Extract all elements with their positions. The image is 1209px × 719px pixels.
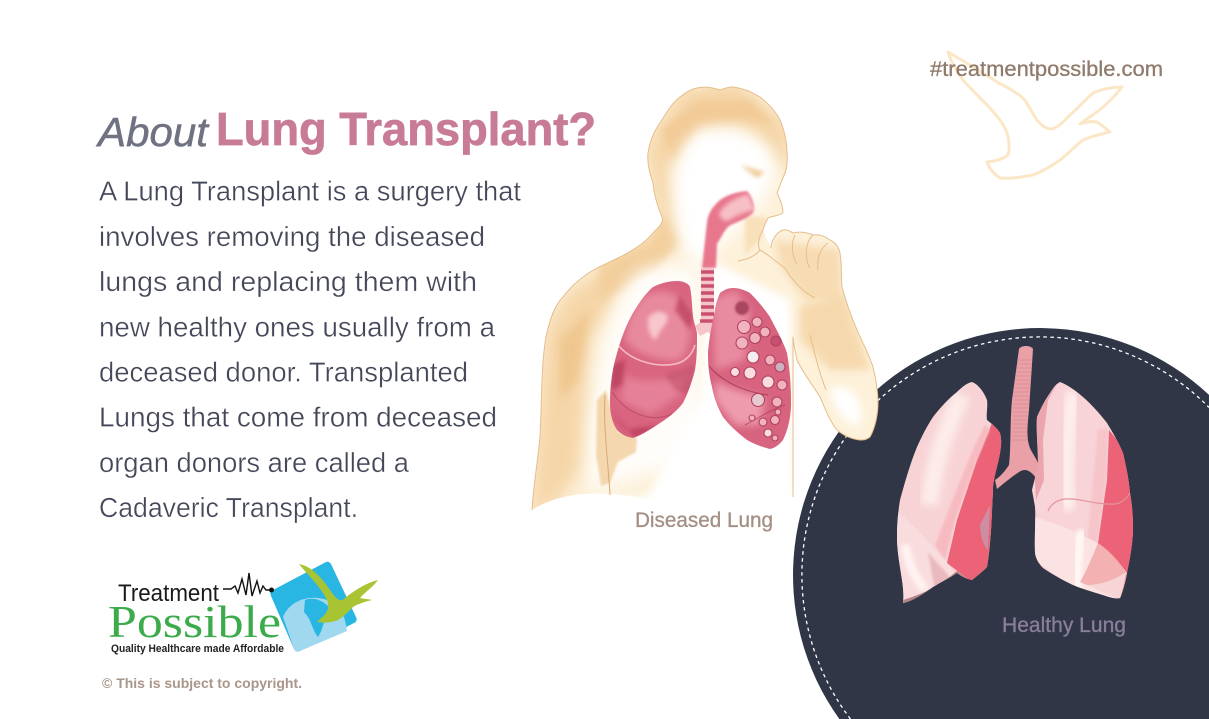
logo pulse line (223, 573, 272, 596)
icon: human figure with diseased lungs (520, 80, 880, 532)
icon: bird outline watermark (948, 52, 1122, 178)
icon: healthy right lung (1032, 382, 1133, 598)
text block: description: new healthy ones usually from a (99, 312, 495, 342)
text block: description: organ donors are called a (99, 447, 409, 478)
icon: healthy trachea (995, 346, 1041, 489)
text block: description: lungs and replacing them with (99, 266, 477, 297)
logo word: Treatment: Treatment (118, 580, 219, 607)
text block: description: A Lung Transplant is a surgery that (99, 176, 521, 206)
watercolor shading (530, 80, 870, 520)
logo green bird (299, 564, 378, 623)
copyright: © This is subject to copyright. (102, 675, 302, 691)
text block: description (99, 176, 521, 523)
text block: description: involves removing the diseased (99, 221, 485, 252)
logo: Treatment Possible (108, 562, 378, 655)
dark circle (793, 328, 1209, 719)
hashtag website: #treatmentpossible.com (930, 58, 1163, 81)
icon: healthy left lung (897, 382, 1002, 603)
body contour lines (532, 87, 878, 510)
panel: healthy lung circle (793, 328, 1209, 719)
label: Healthy Lung: Healthy Lung (1002, 614, 1126, 637)
icon: diseased right lung (708, 288, 791, 449)
text block: description: deceased donor. Transplanted (99, 356, 468, 388)
trachea rings (1012, 360, 1032, 440)
logo blue square (270, 562, 357, 652)
logo globe (283, 598, 347, 652)
logo tagline: Quality Healthcare made Affordable (111, 643, 284, 655)
arm behind torso (596, 390, 637, 486)
text block: description: Cadaveric Transplant. (99, 492, 358, 523)
icon: diseased left lung (610, 281, 697, 438)
logo pulse dot (269, 588, 274, 592)
title words: Lung Transplant?: Lung Transplant? (216, 103, 596, 155)
logo word: Possible: Possible (108, 596, 281, 647)
text block: description: Lungs that come from deceased (99, 402, 497, 432)
dashed ring (802, 337, 1209, 719)
lung cavities (730, 317, 787, 441)
title (95, 103, 596, 155)
body outline fill (520, 80, 880, 520)
label: Diseased Lung: Diseased Lung (635, 509, 773, 532)
throat and windpipe (702, 191, 754, 268)
title word: About: About (95, 109, 210, 155)
windpipe rings (695, 268, 722, 340)
